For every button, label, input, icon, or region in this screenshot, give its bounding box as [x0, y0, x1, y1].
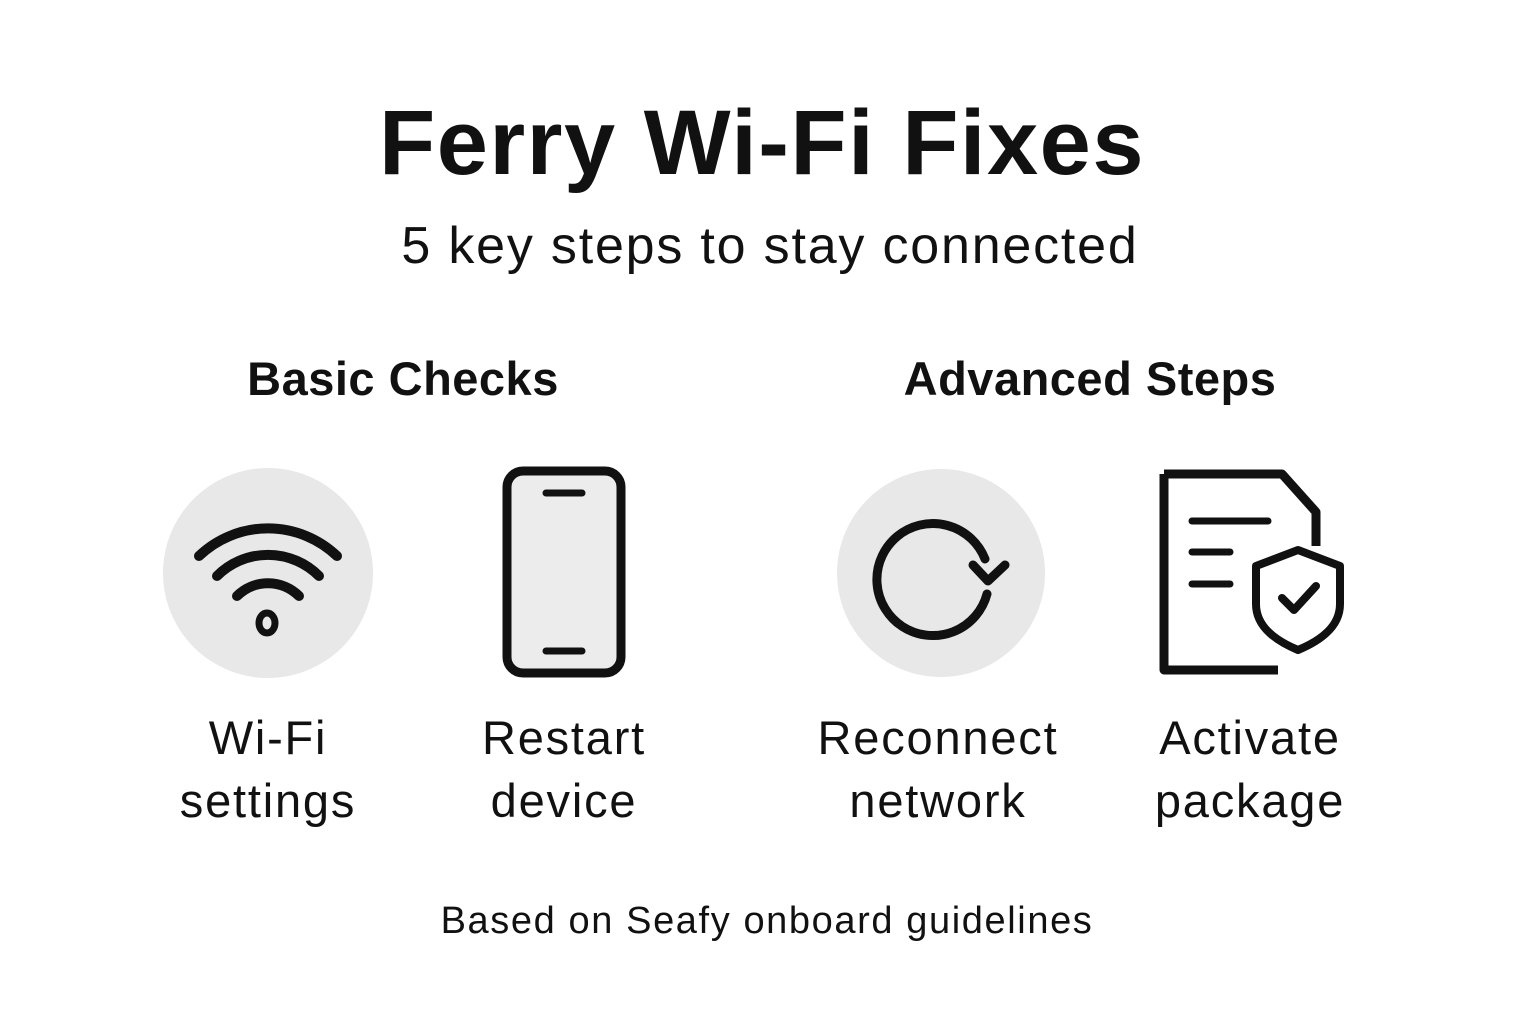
title: Ferry Wi-Fi Fixes	[379, 92, 1145, 194]
label: reconnect network: Reconnect	[818, 711, 1058, 764]
heading: basic checks: Basic Checks	[247, 352, 559, 405]
icon: wifi	[163, 468, 373, 678]
icon: document with shield	[1160, 470, 1344, 674]
label: restart device	[482, 711, 646, 827]
label: wifi settings	[180, 711, 356, 827]
label: activate package: Activate	[1159, 711, 1341, 764]
heading: advanced steps: Advanced Steps	[904, 352, 1276, 405]
label: reconnect network: network	[849, 774, 1027, 827]
label: activate package: package	[1155, 774, 1345, 827]
label: activate package	[1155, 711, 1345, 827]
label: restart device: device	[491, 774, 637, 827]
label: restart device: Restart	[482, 711, 646, 764]
label: wifi settings: settings	[180, 774, 356, 827]
icon: reconnect	[837, 469, 1045, 677]
label: wifi settings: Wi-Fi	[209, 711, 327, 764]
subtitle: 5 key steps to stay connected	[401, 217, 1139, 275]
footer: Based on Seafy onboard guidelines	[441, 900, 1093, 942]
icon: phone	[502, 466, 626, 678]
label: reconnect network	[818, 711, 1058, 827]
